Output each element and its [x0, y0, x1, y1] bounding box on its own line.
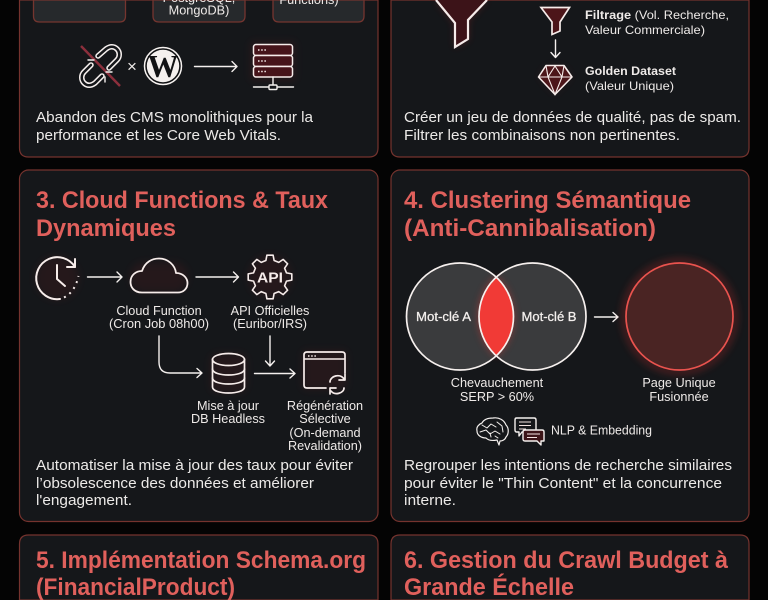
filter label — [585, 8, 729, 37]
icon: clock — [35, 256, 79, 300]
arrow: cloud to database — [159, 336, 202, 378]
body text: l'engagement. — [36, 493, 132, 509]
arrow — [194, 62, 237, 72]
body text — [404, 458, 732, 509]
label: NLP and embedding: NLP & Embedding — [551, 424, 652, 438]
option box: database: MongoDB) — [169, 4, 229, 18]
multiplication sign: × — [127, 57, 137, 76]
option box: functions — [273, 0, 364, 22]
icon: small funnel — [541, 8, 570, 34]
icon: large funnel — [436, 0, 487, 47]
label: SERP overlap — [451, 376, 544, 404]
golden dataset label: Golden Dataset — [585, 64, 676, 78]
merged page circle — [624, 262, 734, 372]
label: SERP overlap: SERP > 60% — [460, 390, 534, 404]
body text — [36, 110, 314, 144]
body text: performance et les Core Web Vitals. — [36, 128, 281, 144]
option box: CMS — [34, 0, 126, 22]
heading — [404, 547, 729, 600]
heading — [36, 187, 329, 242]
label: cloud function: Cloud Function — [116, 304, 202, 318]
arrow — [254, 369, 295, 378]
label: database update — [191, 399, 265, 426]
label: API officielles: (Euribor/IRS) — [233, 317, 307, 331]
label: selective regeneration: Régénération — [287, 399, 363, 413]
body text: Regrouper les intentions de recherche similaires — [404, 458, 732, 474]
body text: Abandon des CMS monolithiques pour la — [36, 110, 314, 126]
body text — [404, 110, 741, 144]
icon: server — [250, 41, 296, 90]
label: API officielles — [231, 304, 309, 331]
body text: pour éviter le "Thin Content" et la concurrence — [404, 476, 722, 492]
body text: interne. — [404, 493, 456, 509]
body text: Automatiser la mise à jour des taux pour éviter — [36, 458, 353, 474]
arrow down — [551, 40, 560, 58]
label: cloud function: (Cron Job 08h00) — [109, 317, 209, 331]
label: database update: Mise à jour — [197, 399, 260, 413]
icon: WordPress logo: W — [148, 48, 178, 84]
heading: 6. Gestion du Crawl Budget à — [404, 547, 729, 574]
filter label: Valeur Commerciale) — [585, 23, 705, 37]
arrow — [196, 272, 238, 282]
icon: browser window with refresh — [302, 350, 347, 394]
label: keyword B: Mot-clé B — [522, 310, 576, 324]
heading: (Anti-Cannibalisation) — [404, 215, 656, 242]
icon: diamond — [538, 66, 572, 94]
label: database update: DB Headless — [191, 412, 265, 426]
icon: API gear: API — [257, 270, 283, 286]
label: merged page: Page Unique — [642, 376, 716, 390]
label: selective regeneration — [287, 399, 363, 453]
icon: API gear — [248, 255, 292, 299]
icon: brain — [477, 418, 508, 445]
arrow: API to regeneration — [266, 336, 274, 366]
panel 1: architecture headless — [20, 0, 378, 157]
panel 5: schema.org — [20, 535, 378, 600]
body text: Filtrer les combinaisons non pertinentes. — [404, 128, 680, 144]
heading: 3. Cloud Functions & Taux — [36, 187, 329, 214]
body text: l’obsolescence des données et améliorer — [36, 476, 314, 492]
label: merged page: Fusionnée — [649, 390, 709, 404]
heading: Dynamiques — [36, 215, 176, 242]
arrow — [594, 312, 618, 322]
option box: database — [153, 0, 245, 22]
panel 2: golden dataset — [391, 0, 749, 157]
label: selective regeneration: Sélective — [299, 412, 351, 426]
label: SERP overlap: Chevauchement — [451, 376, 544, 390]
heading: 5. Implémentation Schema.org — [36, 547, 366, 574]
label: keyword A: Mot-clé A — [416, 310, 472, 324]
body text: Créer un jeu de données de qualité, pas de spam. — [404, 110, 741, 126]
heading: 4. Clustering Sémantique — [404, 187, 691, 214]
icon: database — [210, 353, 247, 393]
panel 6: crawl budget — [391, 535, 749, 600]
label: merged page — [642, 376, 716, 404]
label: API officielles: API Officielles — [231, 304, 309, 318]
label: cloud function — [109, 304, 209, 331]
venn diagram — [406, 263, 586, 370]
golden dataset label — [585, 64, 676, 93]
arrow — [88, 272, 122, 282]
heading — [36, 547, 366, 600]
panel 4: semantic clustering — [391, 170, 749, 522]
label: selective regeneration: (On-demand — [289, 426, 361, 440]
icon: cloud — [130, 258, 188, 292]
filter label: Filtrage (Vol. Recherche, — [585, 8, 729, 22]
icon: broken link crossed out — [81, 46, 120, 86]
heading — [404, 187, 691, 242]
panel 3: cloud functions — [20, 170, 378, 522]
body text — [36, 458, 353, 509]
label: selective regeneration: Revalidation) — [288, 439, 362, 453]
golden dataset label: (Valeur Unique) — [585, 79, 674, 93]
icon: chat bubbles — [515, 418, 544, 445]
